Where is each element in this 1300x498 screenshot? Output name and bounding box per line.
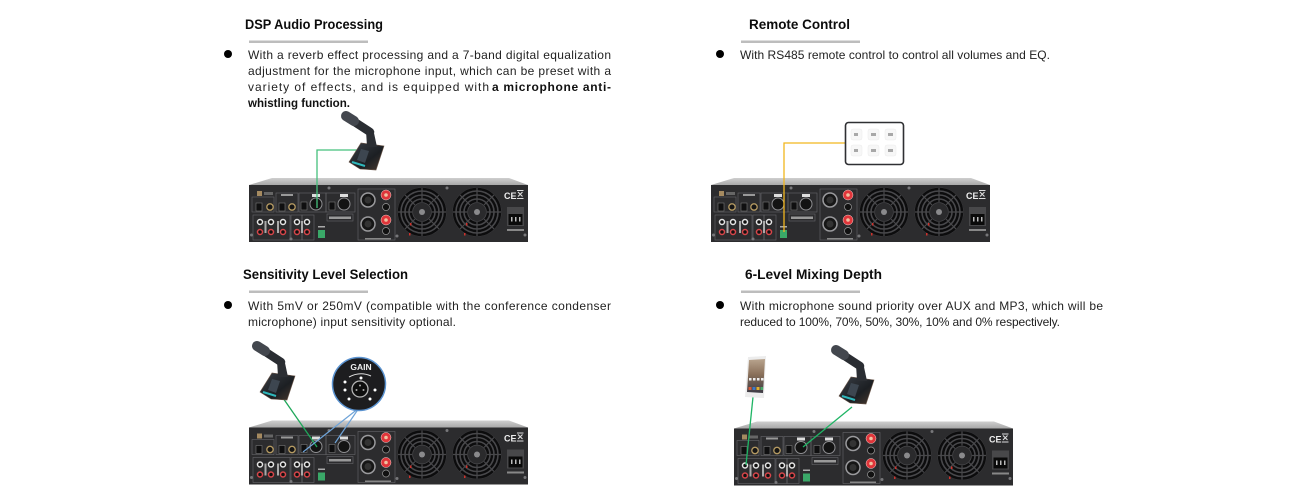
text block: DSP description: With a reverb effect processing and a 7-band digital equalization bbox=[248, 48, 611, 62]
heading: Remote Control: Remote Control bbox=[749, 17, 850, 32]
bullet bbox=[224, 50, 232, 58]
icon: wall remote control panel bbox=[846, 122, 904, 164]
bullet bbox=[716, 301, 724, 309]
icon: microphone bbox=[346, 116, 384, 170]
text block: mixing description: With microphone sound priority over AUX and MP3, which will be bbox=[740, 299, 1103, 313]
text block: DSP description: a microphone anti- bbox=[492, 80, 611, 94]
green cable bbox=[283, 398, 317, 447]
panel: 6-Level Mixing Depth bbox=[716, 267, 1103, 486]
text block: DSP description: variety of effects, and is equipped with bbox=[248, 80, 489, 94]
text block: remote description: With RS485 remote control to control all volumes and EQ. bbox=[740, 48, 1050, 62]
text block: mixing description bbox=[740, 299, 1103, 329]
heading: 6-Level Mixing Depth: 6-Level Mixing Depth bbox=[745, 267, 882, 282]
text block: DSP description bbox=[247, 48, 611, 110]
amplifier rear panel bbox=[249, 420, 528, 484]
icon: smartphone bbox=[745, 356, 766, 398]
panel: DSP Audio Processing bbox=[224, 17, 611, 242]
text block: mixing description: reduced to 100%, 70%, 50%, 30%, 10% and 0% respectively. bbox=[740, 315, 1060, 329]
amplifier rear panel bbox=[249, 178, 528, 242]
amplifier rear panel bbox=[734, 422, 1013, 486]
text block: DSP description: whistling function. bbox=[247, 96, 350, 110]
text block: sensitivity description bbox=[248, 299, 611, 329]
icon: microphone bbox=[836, 350, 874, 404]
blue gain lines bbox=[303, 408, 359, 452]
green cables bbox=[746, 397, 852, 465]
text block: sensitivity description: With 5mV or 250mV (compatible with the conference condenser bbox=[248, 299, 611, 313]
callout: gain knob: GAIN bbox=[350, 362, 372, 372]
yellow cable bbox=[784, 143, 845, 232]
panel: Remote Control bbox=[711, 17, 1050, 242]
green cable bbox=[317, 150, 357, 208]
heading: Sensitivity Level Selection: Sensitivity Level Selection bbox=[243, 267, 408, 282]
text block: sensitivity description: microphone) input sensitivity optional. bbox=[248, 315, 456, 329]
panel: Sensitivity Level Selection bbox=[224, 267, 611, 484]
amplifier rear panel bbox=[711, 178, 990, 242]
text block: DSP description: adjustment for the microphone input, which can be preset with a bbox=[248, 64, 611, 78]
bullet bbox=[716, 50, 724, 58]
bullet bbox=[224, 301, 232, 309]
heading: DSP Audio Processing: DSP Audio Processing bbox=[245, 17, 383, 32]
icon: microphone bbox=[257, 346, 295, 400]
callout: gain knob bbox=[332, 358, 386, 410]
